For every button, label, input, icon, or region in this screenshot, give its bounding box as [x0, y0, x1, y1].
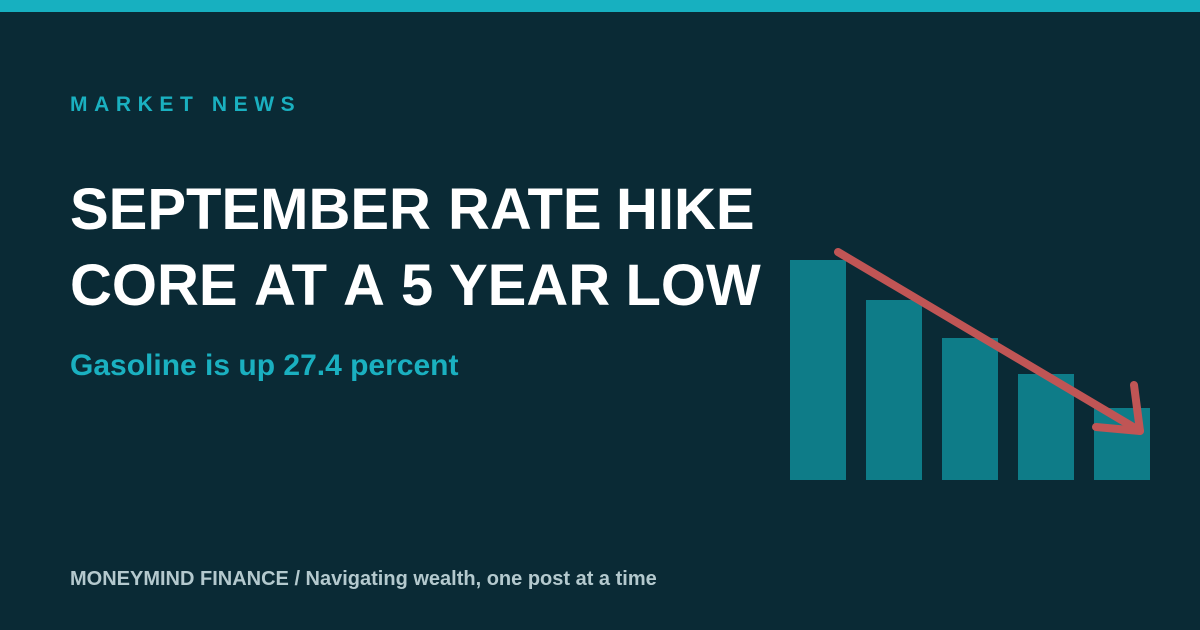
eyebrow label: MARKET NEWS	[70, 93, 301, 116]
title: HIKE	[616, 177, 755, 242]
subtitle: Gasoline is up 27.4 percent	[70, 349, 458, 382]
top accent bar	[0, 0, 1200, 12]
title: AT	[254, 253, 327, 318]
title	[70, 177, 761, 318]
title: YEAR	[449, 253, 610, 318]
title: 5	[401, 253, 433, 318]
bars	[790, 260, 1150, 480]
title: CORE	[70, 253, 238, 318]
icon: downward arrow	[838, 252, 1140, 431]
title: A	[343, 253, 385, 318]
title: LOW	[626, 253, 761, 318]
footer brand line: MONEYMIND FINANCE / Navigating wealth, one post at a time	[70, 568, 657, 590]
title: RATE	[448, 177, 602, 242]
title: SEPTEMBER	[70, 177, 431, 242]
